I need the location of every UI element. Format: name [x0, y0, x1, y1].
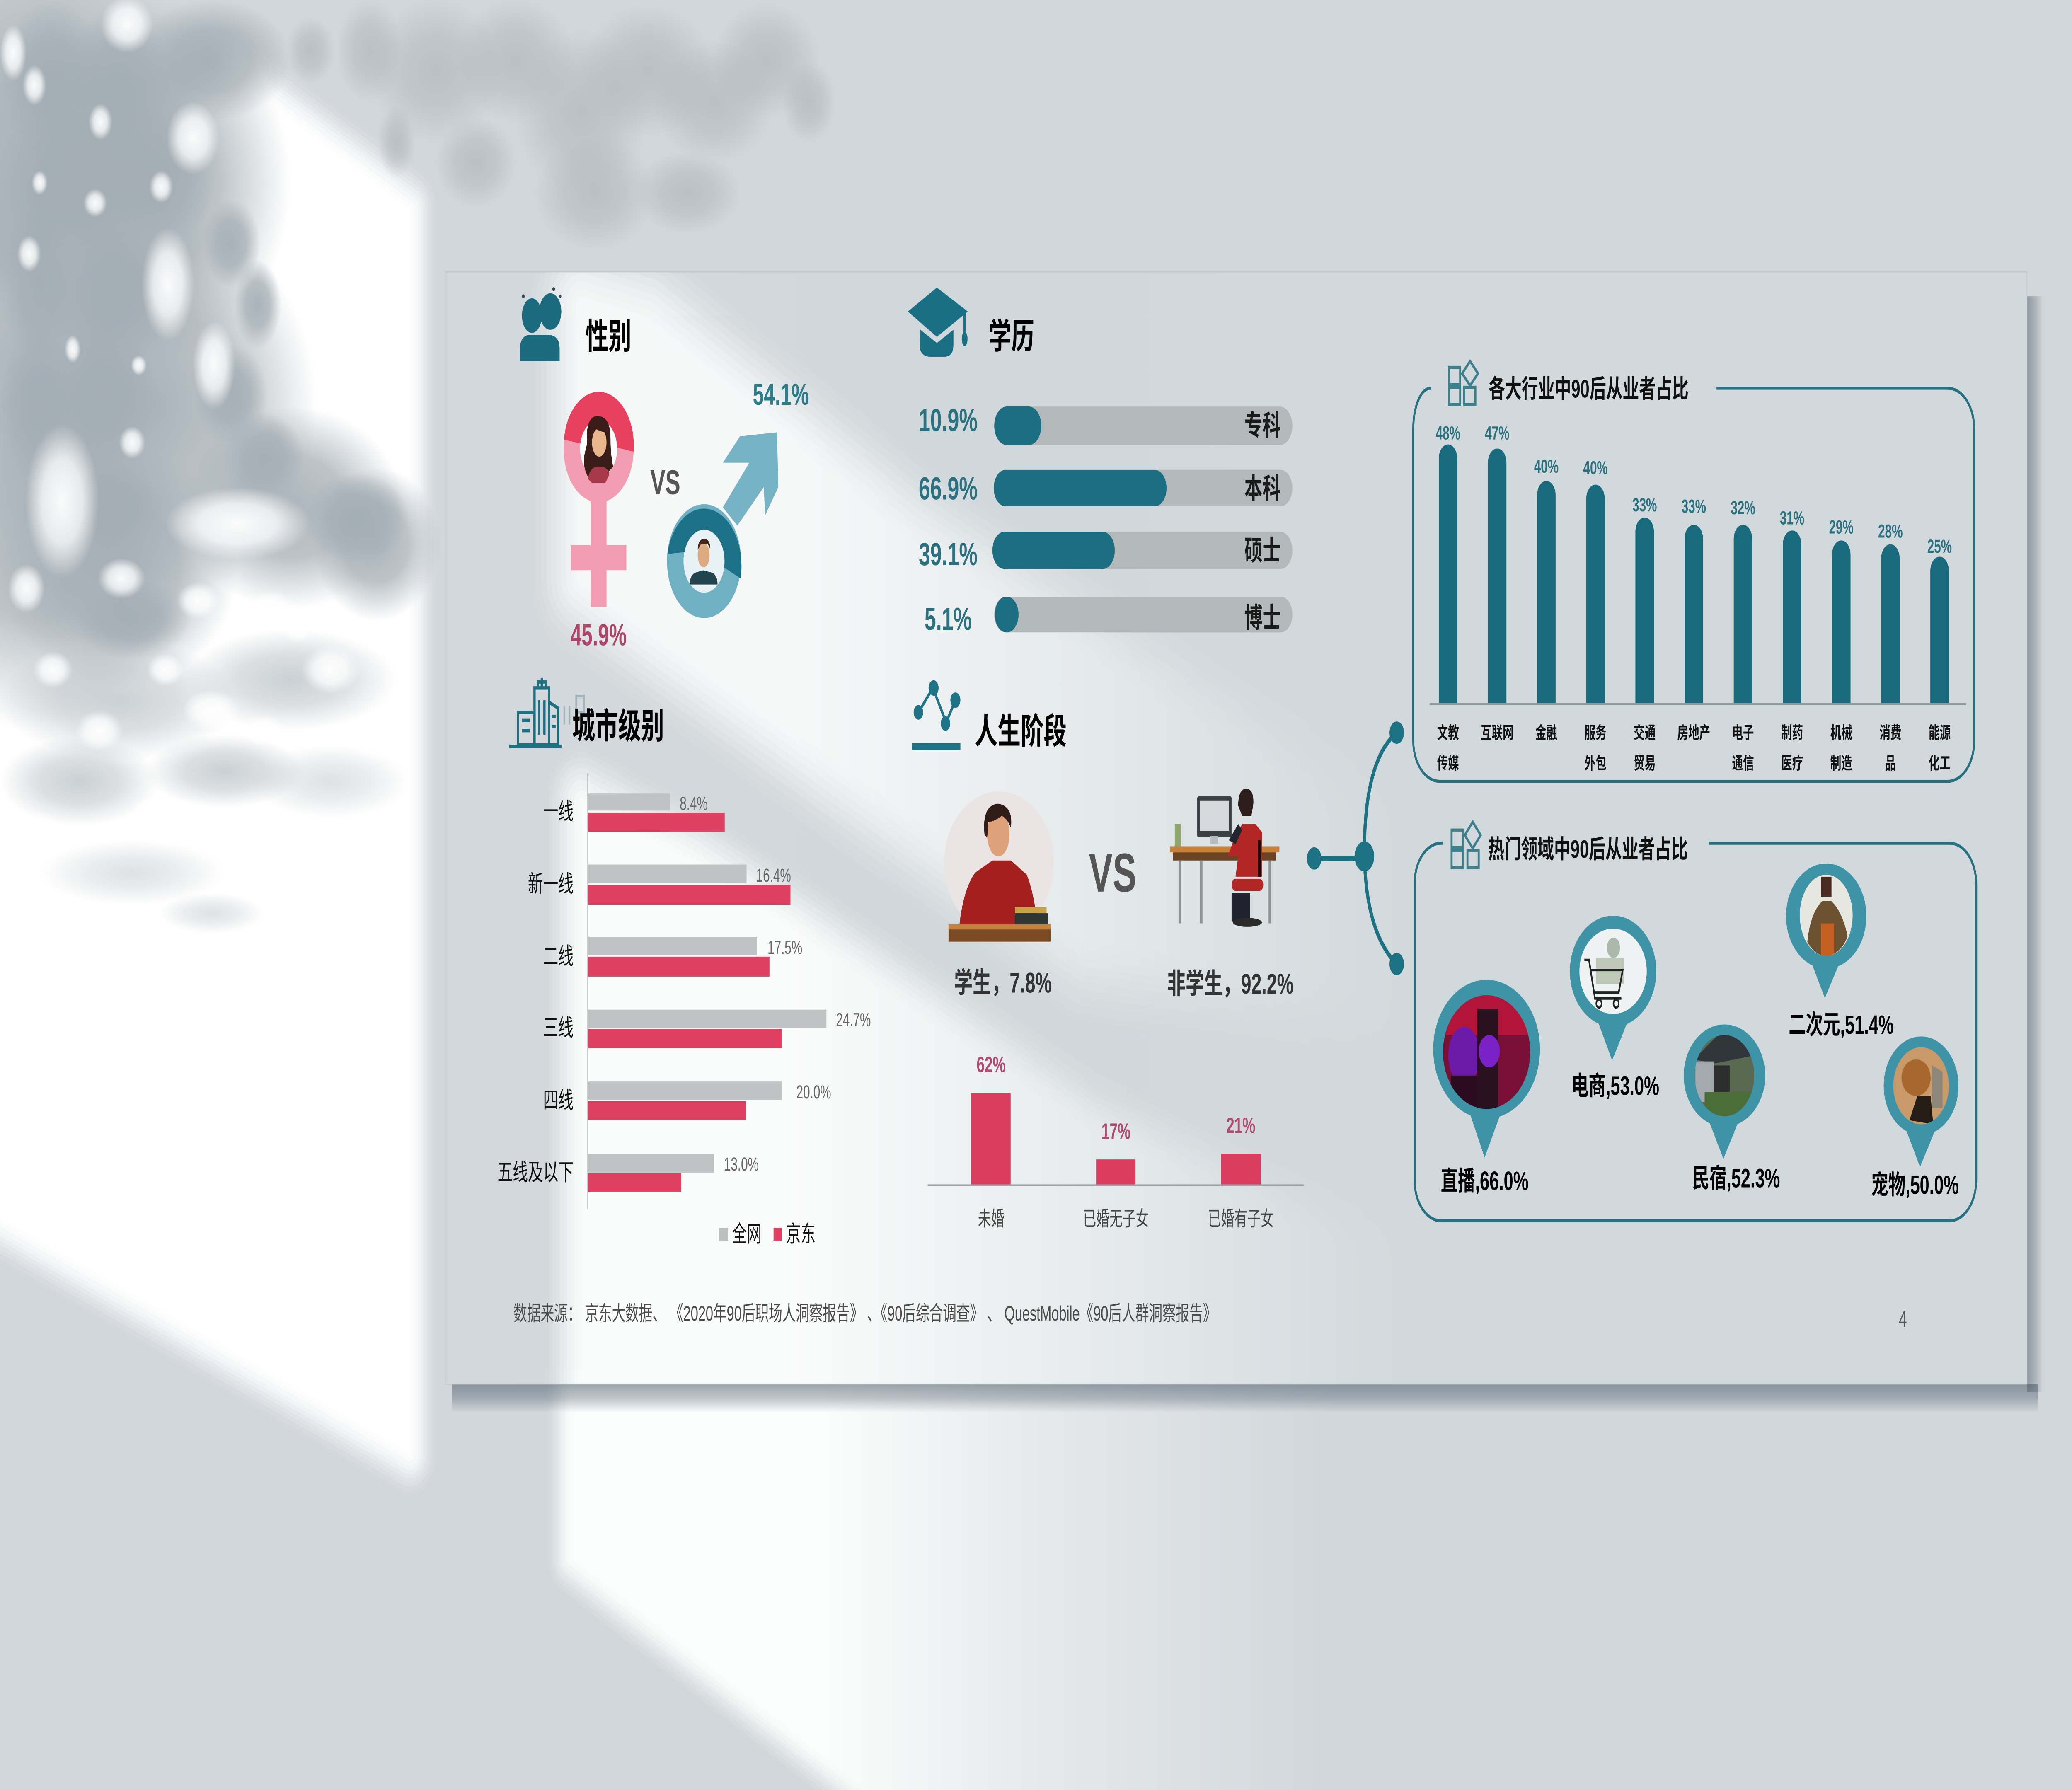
panel: life stage: [912, 680, 1304, 1230]
icon: woman portrait: [584, 416, 613, 483]
row: new tier 1: [528, 865, 791, 905]
category labels: 传媒: [1437, 755, 1459, 773]
bar: bachelor: [919, 470, 1293, 506]
pin: homestay: 民宿,52.3%: [1692, 1164, 1780, 1193]
row: tier 4: [543, 1081, 831, 1120]
column: unmarried: 未婚: [978, 1207, 1004, 1230]
pin: anime: [1786, 864, 1894, 1040]
background wall with window light: [0, 64, 1225, 1790]
category labels: 制药: [1781, 724, 1803, 743]
category labels: 外包: [1585, 755, 1607, 773]
legend: 全网: [732, 1221, 762, 1247]
data labels: 33%: [1632, 495, 1657, 516]
percent: female: 45.9%: [571, 618, 627, 652]
source note: 数据来源： 京东大数据、 《2020年90后职场人洞察报告》 、《90后综合调查》 、 QuestMobile《90后人群洞察报告》: [513, 1302, 1217, 1326]
VS label: VS: [650, 462, 680, 501]
pin: anime: 二次元,51.4%: [1789, 1010, 1894, 1040]
slide shadow: [452, 296, 2043, 1413]
category labels: 电子: [1732, 724, 1754, 743]
heading: 各大行业中90后从业者占比: [1489, 375, 1689, 403]
row: tier 5 and below: 五线及以下: [498, 1160, 574, 1185]
panel: education: [908, 288, 1293, 637]
category labels: 文教: [1437, 724, 1459, 743]
panel: hot fields: [1415, 822, 1976, 1221]
category labels: 服务: [1585, 724, 1607, 743]
heading: 学历: [988, 317, 1034, 356]
icon: man portrait: [690, 539, 718, 585]
category labels: 医疗: [1781, 755, 1803, 773]
legend: [719, 1221, 816, 1247]
data labels: [1436, 423, 1952, 557]
data labels: 48%: [1436, 423, 1460, 444]
panel outline: [1413, 388, 1974, 781]
panel: gender: [520, 287, 809, 652]
category labels: 金融: [1535, 724, 1557, 743]
pin: pets: [1871, 1036, 1959, 1200]
pin: homestay: [1684, 1024, 1780, 1193]
icon: squares and diamond: [1449, 361, 1478, 404]
icon: graduation cap: [908, 288, 968, 357]
category labels: 品: [1885, 755, 1896, 773]
icon: couple: [520, 287, 562, 361]
VS label: VS: [1089, 842, 1136, 903]
icon: line nodes: [912, 680, 961, 750]
bar: doctorate: 博士: [1244, 602, 1280, 633]
row: tier 3: [543, 1009, 871, 1048]
bar: associate: 10.9%: [919, 402, 978, 438]
row: tier 2: 二线: [543, 943, 574, 970]
row: tier 3: 24.7%: [836, 1009, 871, 1030]
row: tier 5 and below: 13.0%: [724, 1154, 759, 1175]
icon: squares and diamond: [1452, 822, 1481, 868]
bar: bachelor: 66.9%: [919, 471, 978, 506]
column: married with children: [1208, 1113, 1274, 1230]
icon: city buildings: [509, 678, 584, 746]
row: tier 4: 四线: [543, 1088, 574, 1114]
row: new tier 1: 16.4%: [756, 865, 791, 886]
bar: master: 39.1%: [919, 536, 978, 572]
row: tier 5 and below: [498, 1154, 759, 1192]
category labels: 贸易: [1634, 755, 1656, 773]
heading: 城市级别: [572, 707, 664, 746]
data labels: 33%: [1682, 496, 1706, 517]
bar: doctorate: 5.1%: [925, 601, 972, 637]
panel outline: [1415, 843, 1976, 1221]
text: student share: 学生，7.8%: [954, 968, 1052, 999]
data labels: 31%: [1780, 508, 1804, 529]
illustration: student: [944, 791, 1054, 942]
category labels: [1437, 724, 1951, 773]
bar: master: 硕士: [1244, 535, 1280, 566]
legend: 京东: [786, 1221, 816, 1247]
row: new tier 1: 新一线: [528, 871, 574, 897]
bar: master: [919, 532, 1293, 572]
bar: associate: [919, 402, 1293, 445]
column: unmarried: 62%: [976, 1052, 1006, 1077]
category labels: 交通: [1634, 724, 1656, 743]
icon: shopping cart: [1584, 938, 1624, 1008]
pin: pets: 宠物,50.0%: [1871, 1171, 1959, 1200]
category labels: 化工: [1929, 755, 1951, 773]
heading: 热门领域中90后从业者占比: [1488, 835, 1688, 864]
heading: 人生阶段: [975, 712, 1067, 752]
bar: associate: 专科: [1244, 410, 1280, 441]
connector between panels: [1307, 721, 1404, 975]
row: tier 1: 8.4%: [680, 793, 708, 814]
illustration: office worker: [1170, 789, 1279, 927]
data labels: 25%: [1927, 536, 1952, 557]
category labels: 消费: [1879, 724, 1901, 743]
row: tier 3: 三线: [543, 1015, 574, 1041]
panel: industries: [1413, 361, 1974, 781]
pin: live streaming: 直播,66.0%: [1441, 1166, 1529, 1196]
column: married no children: 17%: [1101, 1119, 1130, 1144]
data labels: 29%: [1829, 517, 1854, 538]
bar: bachelor: 本科: [1244, 473, 1280, 504]
data labels: 32%: [1731, 498, 1755, 519]
row: tier 2: 17.5%: [767, 937, 802, 958]
data labels: 47%: [1485, 423, 1510, 444]
row: tier 2: [543, 937, 802, 977]
data labels: 40%: [1534, 456, 1559, 477]
bar: doctorate: [925, 597, 1293, 637]
tree shadow: [0, 0, 835, 934]
pin: e-commerce: [1570, 916, 1659, 1101]
column chart: industries: [1430, 423, 1966, 773]
column: married no children: [1083, 1119, 1149, 1230]
column: married with children: 21%: [1226, 1113, 1255, 1138]
male symbol: [667, 432, 778, 605]
category labels: 制造: [1830, 755, 1852, 773]
column: unmarried: [971, 1052, 1011, 1230]
pin: e-commerce: 电商,53.0%: [1571, 1072, 1659, 1101]
category labels: 通信: [1732, 755, 1754, 773]
female symbol: [564, 392, 634, 607]
text: non-student share: 非学生，92.2%: [1167, 969, 1293, 1000]
data labels: 28%: [1878, 521, 1903, 542]
horizontal bar chart: [498, 773, 871, 1209]
row: tier 1: [543, 793, 725, 832]
column: married no children: 已婚无子女: [1083, 1207, 1149, 1230]
panel: city tier: [498, 678, 871, 1247]
column: married with children: 已婚有子女: [1208, 1207, 1274, 1230]
category labels: 能源: [1929, 724, 1951, 743]
pin: live streaming: [1433, 980, 1540, 1196]
data labels: 40%: [1583, 457, 1608, 479]
row: tier 4: 20.0%: [796, 1082, 831, 1103]
column chart: marital status: [928, 1052, 1304, 1230]
page number: 4: [1899, 1306, 1907, 1332]
category labels: 机械: [1830, 724, 1852, 743]
heading: 性别: [586, 317, 632, 356]
row: tier 1: 一线: [543, 799, 574, 825]
slide panel: [445, 272, 2027, 1421]
percent: male: 54.1%: [753, 378, 809, 412]
category labels: 互联网: [1481, 724, 1514, 743]
category labels: 房地产: [1677, 724, 1710, 743]
